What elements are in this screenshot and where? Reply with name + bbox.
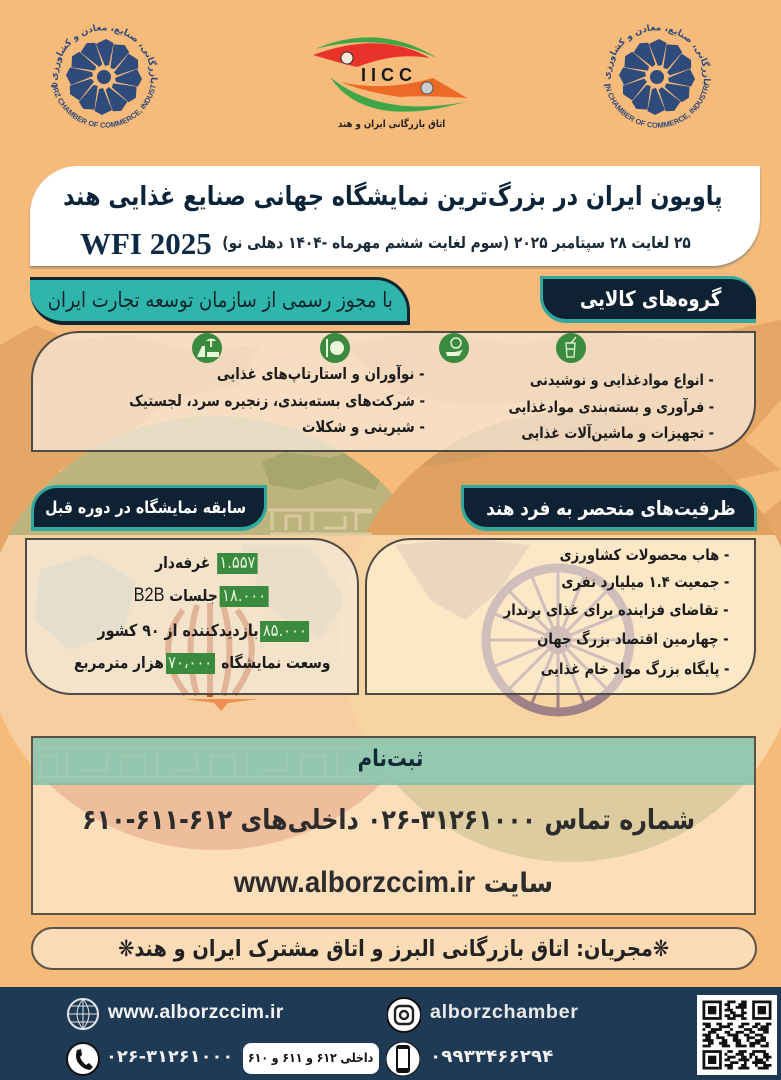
phone number: ۰۲۶-۳۱۲۶۱۰۰۰ [106, 1047, 233, 1067]
event name: WFI 2025 [80, 226, 212, 261]
icon: plate [320, 333, 350, 363]
stat: B2B: جلسات B2B [134, 585, 218, 606]
text block: product list left: - نوآوران و استارتاپ‌های غذایی [217, 365, 425, 383]
stat: B2B [134, 585, 269, 607]
registration title: ثبت‌نام [358, 746, 424, 772]
icon: Iran emblem [168, 603, 252, 697]
stat: area: وسعت نمایشگاه هزار مترمربع [74, 653, 330, 672]
heading: product groups [540, 276, 756, 323]
banner: official license [30, 277, 410, 325]
logo: left chamber emblem: اتاق بازرگانی، صنایع، معادن و کشاورزی البرز [50, 24, 158, 88]
website: www.alborzccim.ir [108, 1001, 284, 1023]
stat: booths: غرفه‌دار [155, 553, 210, 572]
capacities list: - جمعیت ۱.۴ میلیارد نفری [561, 573, 729, 591]
instagram handle: alborzchamber [430, 1001, 579, 1023]
capacities list: - چهارمین اقتصاد بزرگ جهان [538, 630, 729, 648]
heading: India capacities: ظرفیت‌های منحصر به فرد هند [486, 497, 736, 520]
organizers pill [31, 927, 757, 970]
icon: globe [67, 998, 99, 1030]
text block: product list right: - فرآوری و بسته‌بندی موادغذایی [508, 398, 714, 416]
phone line: شماره تماس ۳۱۲۶۱۰۰۰-۰۲۶ داخلی‌های ۶۱۲-۶۱۱-۶۱۰ [83, 803, 695, 836]
panel: product groups [31, 331, 756, 452]
extension badge [243, 1043, 379, 1074]
stat: booths [154, 553, 258, 574]
icon: drink [556, 333, 586, 363]
icon: factory [192, 333, 222, 363]
panel: India capacities [365, 538, 756, 695]
website line: سایت www.alborzccim.ir [234, 866, 553, 899]
panel: registration [31, 736, 756, 915]
icon: phone [66, 1042, 100, 1076]
logo: IICC [313, 37, 467, 112]
stat: visitors: ۸۵.۰۰۰ [263, 621, 306, 641]
stat: visitors: بازدیدکننده از ۹۰ کشور [97, 621, 258, 640]
logo: left chamber emblem: ALBORZ CHAMBER OF COMMERCE, INDUSTRIES [52, 82, 156, 128]
icon: Ashoka wheel [486, 568, 630, 712]
heading: previous edition [31, 485, 267, 531]
logo: IICC: IICC [361, 65, 417, 85]
extension badge: داخلی ۶۱۲ و ۶۱۱ و ۶۱۰ [248, 1050, 374, 1065]
logo caption: اتاق بازرگانی ایران و هند [338, 119, 446, 130]
text block: product list right [508, 371, 714, 442]
text block: product list left [129, 364, 425, 436]
stat: area: ۷۰،۰۰۰ [168, 653, 212, 673]
logo: right chamber emblem: IRAN CHAMBER OF COMMERCE, INDUSTRIES [606, 84, 709, 128]
panel: previous edition stats [25, 538, 359, 695]
capacities list: - پایگاه بزرگ مواد خام غذایی [540, 660, 729, 678]
logo: right chamber emblem: اتاق بازرگانی، صنایع، معادن و کشاورزی ایران [604, 24, 711, 86]
text block: product list left: - شیرینی و شکلات [302, 418, 425, 436]
capacities list [503, 546, 729, 678]
footer [0, 987, 781, 1080]
text block: product list right: - انواع موادغذایی و نوشیدنی [530, 371, 714, 389]
date line: ۲۵ لغایت ۲۸ سپتامبر ۲۰۲۵ (سوم لغایت ششم مهرماه -۱۴۰۴ دهلی نو) [222, 233, 691, 252]
QR code [697, 995, 777, 1075]
registration header [33, 738, 754, 785]
banner: official license: با مجوز رسمی از سازمان توسعه تجارت ایران [47, 288, 393, 312]
background map and globes [0, 320, 781, 862]
stat: visitors [96, 621, 310, 642]
heading: India capacities [461, 485, 757, 531]
mobile number: ۰۹۹۳۳۴۶۶۲۹۴ [430, 1047, 553, 1067]
stat: B2B: ۱۸.۰۰۰ [222, 586, 266, 606]
text block: product list left: - شرکت‌های بسته‌بندی، زنجیره سرد، لجستیک [129, 392, 425, 410]
main heading: پاویون ایران در بزرگ‌ترین نمایشگاه جهانی صنایع غذایی هند [63, 182, 723, 212]
icon: hand with coin [439, 333, 469, 363]
capacities list: - هاب محصولات کشاورزی [559, 546, 729, 564]
calligraphic band [37, 747, 363, 778]
icon: instagram [387, 997, 421, 1033]
stat: booths: ۱.۵۵۷ [219, 553, 255, 573]
organizers pill: ❋مجریان: اتاق بازرگانی البرز و اتاق مشترک ایران و هند❋ [119, 936, 669, 962]
heading: product groups: گروه‌های کالایی [580, 287, 722, 311]
text block: product list right: - تجهیزات و ماشین‌آلات غذایی [521, 424, 714, 442]
icon: mobile [386, 1042, 420, 1076]
capacities list: - تقاضای فزاینده برای غذای برندار [504, 601, 729, 619]
panel: title [30, 166, 760, 266]
Iran flag calligraphic band [268, 510, 372, 534]
logo: left chamber emblem [50, 24, 158, 128]
heading: previous edition: سابقه نمایشگاه در دوره قبل [46, 498, 246, 517]
logo: right chamber emblem [604, 24, 711, 128]
